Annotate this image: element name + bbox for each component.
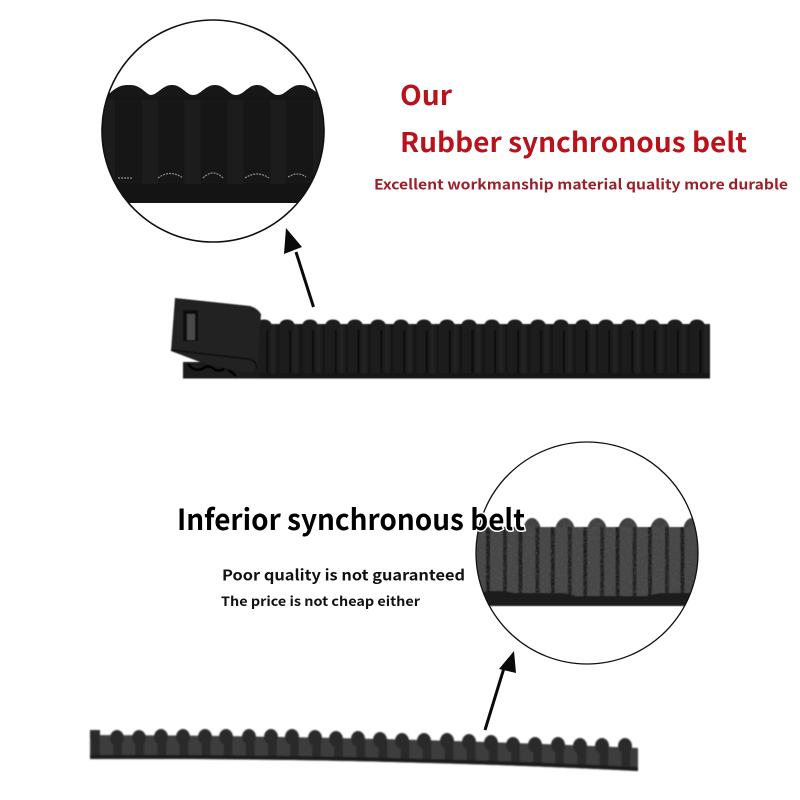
magnified rubber belt teeth xyxy=(102,85,324,203)
belt body and teeth xyxy=(183,320,710,378)
heading line: Our: Our xyxy=(400,74,452,113)
heading: inferior synchronous belt xyxy=(177,442,710,664)
panel: magnified view of inferior belt xyxy=(470,442,710,664)
arrow: to rubber belt magnifier xyxy=(284,228,314,307)
magnifier circle outline xyxy=(102,20,324,242)
rubber belt with clip xyxy=(171,298,710,378)
belt clip xyxy=(171,298,261,378)
panel: magnified view of rubber belt xyxy=(90,20,340,242)
inferior belt xyxy=(90,729,638,771)
heading line: Rubber synchronous belt: Rubber synchronous belt xyxy=(400,121,747,160)
subheading: workmanship: Excellent workmanship material quality more durable xyxy=(374,174,788,194)
clip slot xyxy=(183,310,198,341)
arrow: to inferior belt magnifier xyxy=(485,651,516,730)
magnifier circle outline xyxy=(476,442,698,664)
magnified inferior belt teeth xyxy=(470,516,710,606)
heading text: Inferior synchronous belt xyxy=(177,497,525,539)
text: poor quality: Poor quality is not guaranteed xyxy=(222,564,465,586)
text: price: The price is not cheap either xyxy=(221,591,420,610)
heading: our rubber synchronous belt xyxy=(374,74,788,194)
